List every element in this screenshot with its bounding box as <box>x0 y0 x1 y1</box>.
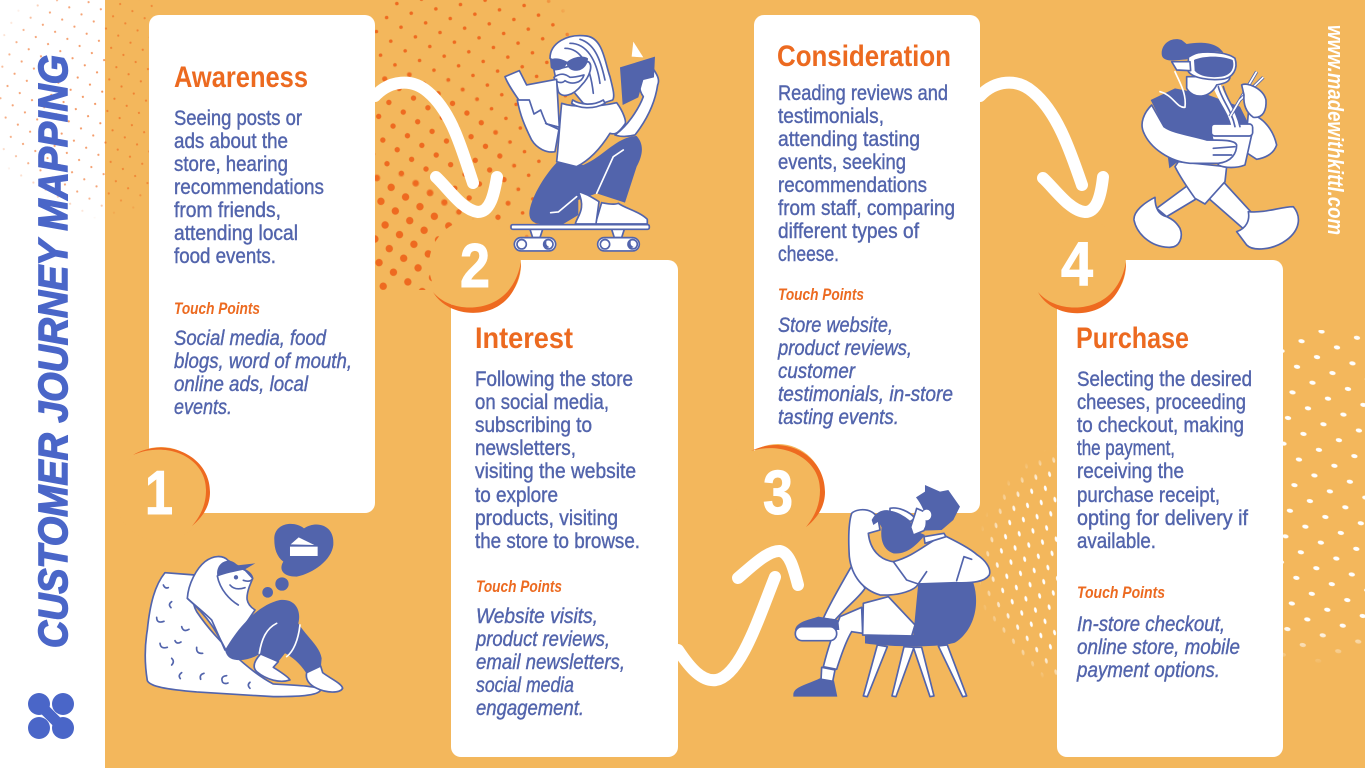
legs <box>529 136 642 224</box>
touch points list: product reviews, <box>475 628 610 651</box>
shoes <box>595 203 647 224</box>
torso <box>1151 88 1248 168</box>
illustration: person reading on skateboard <box>505 36 659 251</box>
heading: purchase: Purchase <box>1076 322 1189 355</box>
headset visor <box>1194 57 1233 77</box>
body: purchase: opting for delivery if <box>1077 507 1248 530</box>
chair legs <box>863 645 887 697</box>
text: awareness card <box>174 61 352 419</box>
touch points list: customer <box>778 360 856 383</box>
shoes <box>254 654 290 681</box>
body: purchase: purchase receipt, <box>1077 484 1220 507</box>
legs <box>225 600 322 673</box>
front leg <box>1157 185 1200 217</box>
touch points list: events. <box>174 396 232 419</box>
touch points list: Website visits, <box>476 605 598 628</box>
touch points list: testimonials, in-store <box>778 383 953 406</box>
website url: www.madewithkittl.com <box>1323 25 1348 235</box>
sidebar panel <box>0 0 105 768</box>
touch points list: In-store checkout, <box>1077 613 1225 636</box>
back leg <box>1207 180 1258 232</box>
right book <box>620 57 655 105</box>
illustration: person drinking from cup in chair <box>793 485 990 697</box>
body: consideration: Reading reviews and <box>778 82 948 105</box>
front arm <box>1142 105 1237 163</box>
shorts <box>1175 162 1227 204</box>
lower shoe <box>821 667 835 683</box>
hood and torso <box>187 557 255 652</box>
text: interest card <box>475 322 640 720</box>
body: purchase <box>1077 368 1252 553</box>
left hand <box>517 100 559 152</box>
body: interest: visiting the website <box>475 460 636 483</box>
body: interest: on social media, <box>475 391 609 414</box>
heading: interest: Interest <box>475 322 573 355</box>
beanbag <box>145 573 321 697</box>
cheese <box>290 537 318 556</box>
body: consideration <box>778 82 955 266</box>
body: consideration: testimonials, <box>778 105 884 128</box>
cable <box>1160 72 1185 107</box>
touch points list: social media <box>476 674 574 697</box>
collar <box>924 533 946 543</box>
touch points list: Store website, <box>778 314 893 337</box>
face <box>911 508 932 535</box>
headset frame <box>1188 52 1236 80</box>
body: consideration: from staff, comparing <box>778 197 955 220</box>
crossed shoe <box>795 617 839 630</box>
front shoe <box>1134 197 1181 247</box>
hair <box>1162 39 1223 61</box>
touch points list: engagement. <box>476 697 584 720</box>
touch points list <box>777 314 953 429</box>
body: interest: the store to browse. <box>475 530 640 553</box>
panel: interest card <box>451 260 678 757</box>
beanbag marks <box>157 585 250 688</box>
body: interest: subscribing to <box>475 414 592 437</box>
chair seat <box>865 583 976 646</box>
touch points list <box>1076 613 1240 682</box>
title: CUSTOMER JOURNEY MAPPING <box>30 55 76 648</box>
heading: consideration: Consideration <box>777 40 951 73</box>
body: purchase: cheeses, proceeding <box>1077 391 1246 414</box>
lower leg <box>823 607 863 669</box>
touch points list: email newsletters, <box>476 651 625 674</box>
touch points list: payment options. <box>1076 659 1220 682</box>
step badge 1: 1 <box>145 459 173 528</box>
cup rim <box>890 508 915 522</box>
touch points list: blogs, word of mouth, <box>174 350 352 373</box>
body: purchase: receiving the <box>1077 460 1184 483</box>
body: purchase: the payment, <box>1077 437 1175 460</box>
sunglasses <box>550 57 588 71</box>
face details <box>187 569 253 650</box>
touch points label: Touch Points <box>476 577 562 596</box>
chopsticks <box>1230 72 1263 117</box>
body: awareness: food events. <box>174 245 276 268</box>
thought bubble <box>274 524 333 577</box>
text: purchase card <box>1076 322 1252 682</box>
touch points list <box>475 605 625 720</box>
step badge 1 <box>114 447 210 541</box>
panel: purchase card <box>1057 260 1283 757</box>
step badge 2 <box>429 219 521 313</box>
back arm <box>1245 113 1277 159</box>
shirt and arm <box>849 510 990 595</box>
body: interest: products, visiting <box>475 507 618 530</box>
hair <box>916 485 960 531</box>
body: awareness: store, hearing <box>174 153 288 176</box>
body: interest: Following the store <box>475 368 633 391</box>
body: awareness: ads about the <box>174 130 288 153</box>
cap <box>217 561 255 577</box>
touch points list: online ads, local <box>174 373 309 396</box>
body: consideration: events, seeking <box>778 151 906 174</box>
body: purchase: available. <box>1077 530 1156 553</box>
icon: clover logo <box>28 693 74 739</box>
step badge 3 <box>732 444 825 536</box>
body: awareness: Seeing posts or <box>174 107 302 130</box>
cup and beard <box>872 510 925 554</box>
body: consideration: attending tasting <box>778 128 920 151</box>
illustration: person with VR headset eating noodles <box>1134 39 1298 249</box>
cup <box>1212 135 1252 167</box>
touch points label: Touch Points <box>1077 583 1165 602</box>
step badge 3: 3 <box>763 459 793 528</box>
arrow: consideration to purchase <box>980 83 1103 212</box>
touch points list: product reviews, <box>777 337 912 360</box>
body: consideration: different types of <box>778 220 919 243</box>
step badge 4: 4 <box>1061 230 1093 299</box>
body: interest: to explore <box>475 484 558 507</box>
body: purchase: to checkout, making <box>1077 414 1244 437</box>
body: awareness: from friends, <box>174 199 281 222</box>
skateboard <box>511 225 649 251</box>
step badge 2: 2 <box>460 232 490 301</box>
right arm and hand <box>615 65 659 136</box>
headset strap <box>1172 62 1191 71</box>
body: consideration: recommendations <box>778 174 927 197</box>
hair <box>550 36 614 105</box>
body: purchase: Selecting the desired <box>1077 368 1252 391</box>
heading: awareness: Awareness <box>174 61 308 94</box>
panel: awareness card <box>149 15 375 513</box>
face <box>554 62 591 95</box>
body: awareness: attending local <box>174 222 298 245</box>
touch points list: online store, mobile <box>1077 636 1240 659</box>
touch points label: Touch Points <box>174 299 260 318</box>
step badge 4 <box>1034 219 1126 313</box>
shirt <box>557 103 625 167</box>
touch points list <box>174 327 352 419</box>
neck and face <box>1187 77 1230 96</box>
body: interest <box>475 368 640 553</box>
back shoe <box>1237 207 1298 249</box>
arrow: awareness to interest <box>375 83 497 212</box>
illustration: person on beanbag dreaming of cheese <box>145 524 343 697</box>
left book <box>505 71 559 127</box>
arrow: interest to consideration <box>678 551 798 680</box>
body: awareness: recommendations <box>174 176 324 199</box>
body: interest: newsletters, <box>475 437 576 460</box>
body: awareness <box>174 107 324 268</box>
eating hand <box>1242 84 1266 117</box>
panel: consideration card <box>754 15 980 513</box>
moustache <box>554 74 584 83</box>
body: consideration: cheese. <box>778 243 839 266</box>
touch points list: tasting events. <box>778 406 899 429</box>
crossed leg <box>823 566 865 620</box>
text: consideration card <box>777 40 955 429</box>
touch points list: Social media, food <box>174 327 327 350</box>
touch points label: Touch Points <box>778 285 864 304</box>
noodles <box>1217 85 1240 127</box>
shorts <box>863 597 915 636</box>
